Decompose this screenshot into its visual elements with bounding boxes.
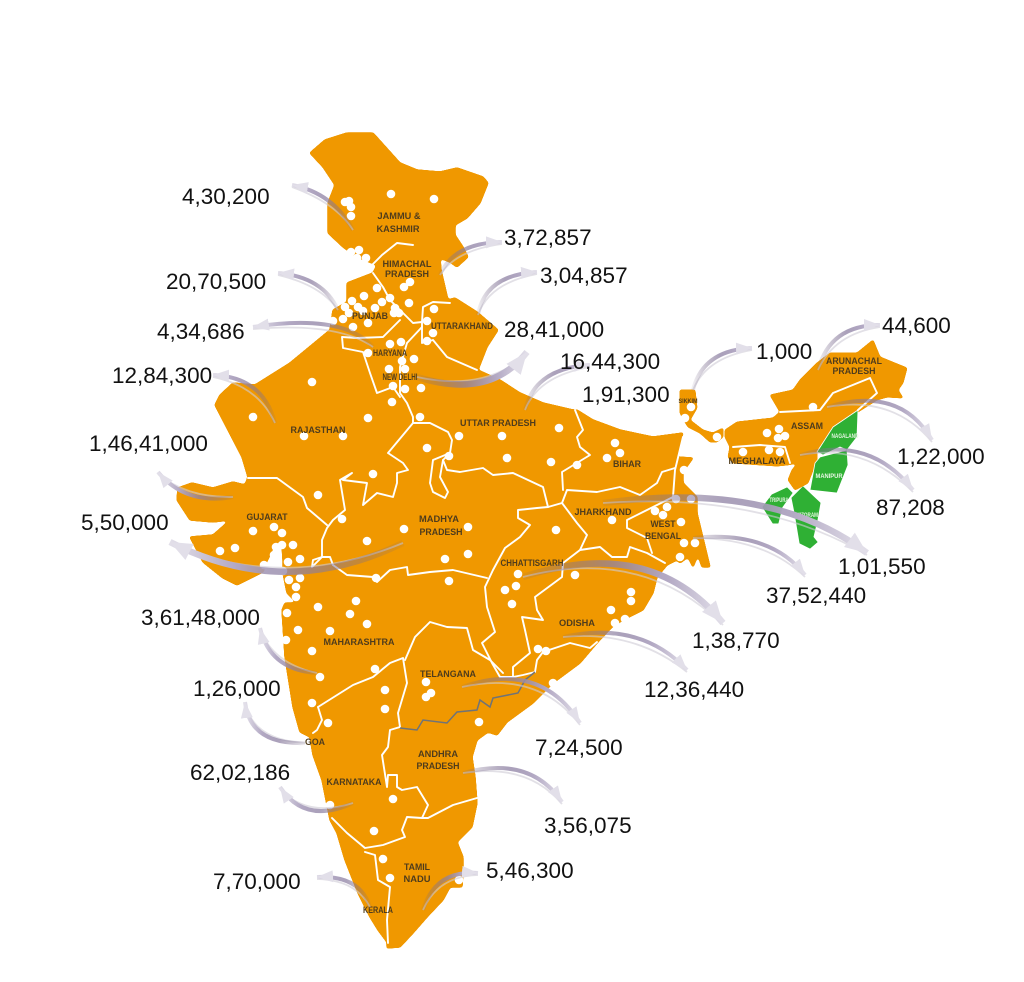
label: Tamil Nadu: TAMIL — [404, 862, 430, 872]
Gujarat arrow and figure: 5,50,000 — [81, 510, 169, 535]
label: Mizoram: MIZORAM — [796, 512, 818, 519]
Odisha arrow and figure — [563, 633, 744, 702]
label: Madhya Pradesh — [419, 514, 462, 537]
Manipur — [810, 450, 848, 493]
Nagaland and Manipur arrow and figure — [800, 450, 945, 520]
Assam arrow and figure: 1,22,000 — [897, 444, 985, 469]
label: Tripura: TRIPURA — [770, 497, 789, 504]
label: Assam: ASSAM — [791, 421, 823, 431]
label: New Delhi: NEW DELHI — [382, 372, 418, 382]
label: Jammu & Kashmir — [376, 211, 421, 234]
label: Odisha: ODISHA — [559, 618, 596, 628]
Sikkim arrow and figure: 1,000 — [756, 339, 812, 364]
Himachal Pradesh arrow and figure — [440, 225, 592, 275]
New Delhi arrow and figure: 28,41,000 — [504, 317, 604, 342]
Maharashtra arrow and figure: 3,61,48,000 — [141, 605, 260, 630]
Kerala arrow and figure — [213, 869, 370, 907]
Tamil Nadu arrow and figure: 5,46,300 — [486, 858, 574, 883]
label: Kerala: KERALA — [363, 905, 393, 915]
label: Arunachal Pradesh: PRADESH — [832, 366, 876, 376]
Kerala arrow and figure: 7,70,000 — [213, 869, 301, 894]
Odisha arrow and figure: 12,36,440 — [644, 677, 744, 702]
Punjab arrow and figure: 20,70,500 — [166, 269, 266, 294]
Chhattisgarh arrow and figure — [523, 563, 780, 653]
Bihar figure: 1,91,300 — [582, 382, 670, 407]
Tripura and Mizoram arrow and figure: 1,01,550 — [838, 554, 926, 579]
label: Madhya Pradesh: MADHYA — [419, 514, 460, 524]
Andhra Pradesh arrow and figure: 3,56,075 — [544, 813, 632, 838]
north-east states in orange — [725, 340, 907, 490]
label: Chhattisgarh: CHHATTISGARH — [500, 558, 564, 568]
Telangana arrow and figure: 7,24,500 — [535, 735, 623, 760]
label: Madhya Pradesh: PRADESH — [420, 527, 462, 537]
state name labels — [246, 211, 882, 915]
Rajasthan lower arrow and figure — [89, 431, 233, 499]
label: Karnataka: KARNATAKA — [326, 777, 382, 787]
Rajasthan arrow and figure — [112, 363, 275, 423]
West Bengal arrow and figure — [693, 537, 866, 608]
Tripura — [763, 488, 792, 523]
Haryana arrow and figure — [157, 319, 373, 347]
label: Telangana: TELANGANA — [420, 669, 476, 679]
Punjab arrow and figure — [166, 269, 338, 310]
Uttar Pradesh arrow and figure — [525, 349, 660, 410]
Rajasthan arrow and figure: 12,84,300 — [112, 363, 212, 388]
label: Tamil Nadu — [404, 862, 430, 884]
Haryana arrow and figure: 4,34,686 — [157, 319, 245, 344]
label: Andhra Pradesh: ANDHRA — [418, 749, 459, 759]
label: Jharkhand: JHARKHAND — [574, 507, 632, 517]
label: Gujarat: GUJARAT — [246, 512, 288, 522]
Tamil Nadu arrow and figure — [423, 858, 574, 910]
label: Haryana: HARYANA — [373, 348, 407, 358]
Gujarat arrow and figure — [81, 510, 403, 572]
Nagaland and Manipur arrow and figure: 87,208 — [876, 495, 945, 520]
map of India — [177, 133, 907, 948]
label: Arunachal Pradesh — [826, 356, 882, 376]
Maharashtra arrow and figure — [141, 605, 317, 673]
label: Goa: GOA — [305, 737, 325, 747]
arrows with state figures — [81, 184, 985, 910]
label: Uttarakhand: UTTARAKHAND — [431, 321, 493, 331]
label: Maharashtra: MAHARASHTRA — [324, 637, 395, 647]
label: Jammu & Kashmir: JAMMU & — [378, 211, 421, 221]
Uttarakhand arrow and figure — [478, 263, 628, 315]
Uttar Pradesh arrow and figure: 16,44,300 — [560, 349, 660, 374]
label: Arunachal Pradesh: ARUNACHAL — [826, 356, 882, 366]
Assam arrow and figure — [827, 401, 985, 469]
Rajasthan lower arrow and figure: 1,46,41,000 — [89, 431, 208, 456]
label: Rajasthan: RAJASTHAN — [290, 425, 346, 435]
Karnataka arrow and figure: 62,02,186 — [190, 760, 290, 785]
label: West Bengal: WEST — [650, 519, 676, 529]
Goa arrow and figure: 1,26,000 — [193, 676, 281, 701]
Tripura and Mizoram arrow and figure — [603, 497, 926, 579]
Telangana and Andhra Pradesh border — [400, 672, 535, 730]
mainland outline — [177, 133, 710, 948]
Uttarakhand arrow and figure: 3,04,857 — [540, 263, 628, 288]
label: West Bengal: BENGAL — [645, 531, 681, 541]
label: Jammu & Kashmir: KASHMIR — [376, 224, 420, 234]
West Bengal arrow and figure: 37,52,440 — [766, 583, 866, 608]
label: Nagaland: NAGALAND — [832, 433, 859, 440]
Sikkim and north Bengal — [680, 390, 723, 442]
Arunachal Pradesh arrow and figure: 44,600 — [882, 313, 951, 338]
label: Manipur: MANIPUR — [816, 473, 843, 480]
label: Bihar: BIHAR — [613, 459, 641, 469]
label: West Bengal — [645, 519, 681, 541]
Andhra Pradesh arrow and figure — [463, 768, 632, 838]
Himachal Pradesh arrow and figure: 3,72,857 — [504, 225, 592, 250]
Chhattisgarh arrow and figure: 1,38,770 — [692, 628, 780, 653]
Telangana arrow and figure — [462, 679, 623, 760]
Karnataka arrow and figure — [190, 760, 353, 811]
label: Sikkim: SIKKIM — [678, 399, 698, 405]
label: Andhra Pradesh — [416, 749, 460, 771]
label: Tamil Nadu: NADU — [404, 874, 430, 884]
Mizoram — [792, 487, 820, 548]
New Delhi arrow and figure — [417, 317, 604, 384]
state borders — [248, 243, 877, 943]
Nagaland — [817, 410, 858, 455]
label: Andhra Pradesh: PRADESH — [416, 761, 460, 771]
city markers — [216, 190, 817, 884]
Jammu & Kashmir arrow and figure — [182, 184, 353, 230]
label: Himachal Pradesh: HIMACHAL — [382, 259, 432, 269]
Arunachal Pradesh arrow and figure — [818, 313, 951, 370]
label: Punjab: PUNJAB — [352, 311, 388, 321]
label: Himachal Pradesh — [382, 259, 432, 279]
Sikkim arrow and figure — [693, 339, 812, 390]
label: Uttar Pradesh: UTTAR PRADESH — [460, 418, 536, 428]
Goa arrow and figure — [193, 676, 305, 743]
label: Himachal Pradesh: PRADESH — [385, 269, 429, 279]
label: Meghalaya: MEGHALAYA — [728, 456, 786, 466]
Jammu & Kashmir arrow and figure: 4,30,200 — [182, 184, 270, 209]
